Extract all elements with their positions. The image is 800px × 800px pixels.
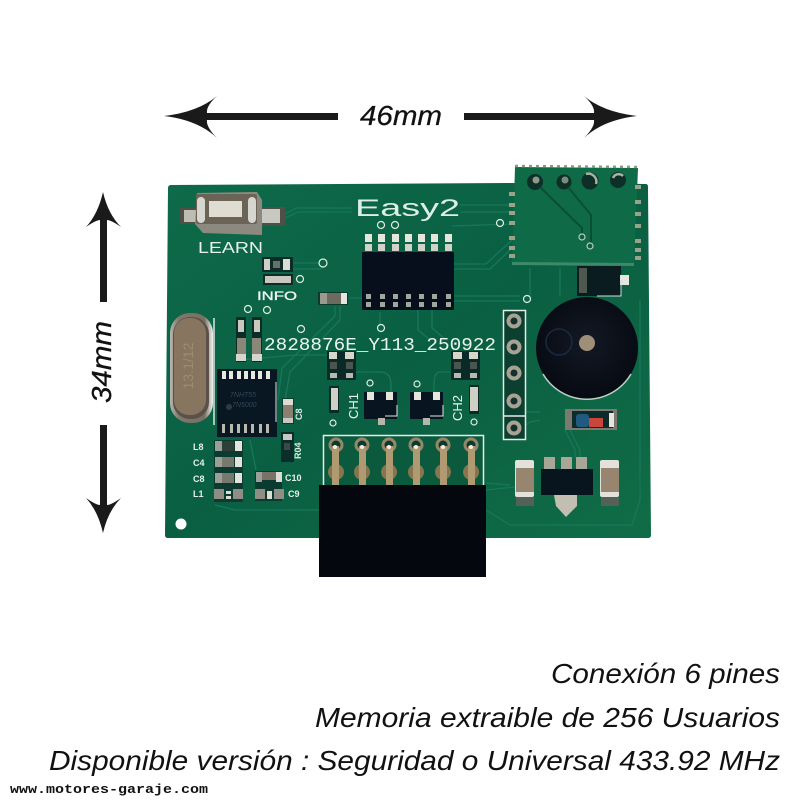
dimension arrow: height 34mm: 34mm: [86, 321, 117, 403]
label: INFO: INFO: [257, 289, 297, 303]
label: CH1: CH1: [346, 393, 361, 419]
pcb base: [165, 183, 651, 538]
copper traces: [215, 205, 640, 525]
transistor CH2: [410, 392, 443, 425]
voltage regulator and capacitors: [515, 457, 619, 517]
text: available version: Disponible versión : Seguridad o Universal 433.92 MHz: [49, 745, 780, 776]
label: Easy2: Easy2: [355, 195, 460, 222]
main IC top: [362, 234, 454, 310]
labels: C10 C9: C9: [288, 489, 300, 499]
crystal: [170, 313, 214, 425]
radio module: [509, 166, 641, 266]
microcontroller: 7NHT55: [230, 392, 256, 399]
labels: L8 C4 C8 L1: C8: [193, 474, 205, 484]
microcontroller: [217, 369, 277, 437]
dimension arrow: width 46mm: 46mm: [360, 100, 442, 131]
labels: C10 C9: [285, 473, 302, 499]
labels: L8 C4 C8 L1: L1: [193, 489, 204, 499]
label: LEARN: LEARN: [198, 240, 263, 257]
six-pin connector: [319, 436, 486, 577]
dimension arrow: width 46mm: [164, 96, 637, 138]
microcontroller: 7N5000: [232, 402, 257, 409]
diode: [565, 409, 617, 430]
passives block: C10 C9: [255, 471, 284, 501]
text: removable memory: Memoria extraible de 256 Usuarios: [315, 702, 780, 733]
components under module: [577, 266, 629, 296]
passives block: L8 C4 C8 L1: [214, 440, 243, 502]
small SMD parts near INFO: [236, 257, 348, 362]
channel 1 components: [327, 351, 356, 413]
watermark url: www.motores-garaje.com: [10, 782, 208, 797]
label: R04 vertical: R04: [293, 442, 303, 459]
buzzer: [536, 297, 638, 399]
transistor CH1: [364, 392, 397, 425]
circuit board: [165, 166, 651, 577]
white silkscreen vias: [244, 220, 530, 426]
dimension arrow: height 34mm: [86, 192, 121, 533]
crystal: 13.1/12: [180, 342, 196, 389]
labels: L8 C4 C8 L1: [193, 442, 205, 499]
text: 6-pin connection: Conexión 6 pines: [551, 658, 780, 689]
push button LEARN: [180, 192, 285, 235]
labels: C10 C9: C10: [285, 473, 302, 483]
serial number: 2828876E_Y113_250922: [264, 336, 496, 356]
channel 2 components: [451, 351, 480, 414]
labels: L8 C4 C8 L1: C4: [193, 458, 205, 468]
pin strip holes: [504, 310, 526, 440]
labels: L8 C4 C8 L1: L8: [193, 442, 204, 452]
mounting hole: [176, 518, 186, 530]
label: CH2: CH2: [450, 395, 465, 421]
label: C8 vertical: C8: [294, 408, 304, 420]
small passives next to microcontroller: [281, 398, 294, 462]
